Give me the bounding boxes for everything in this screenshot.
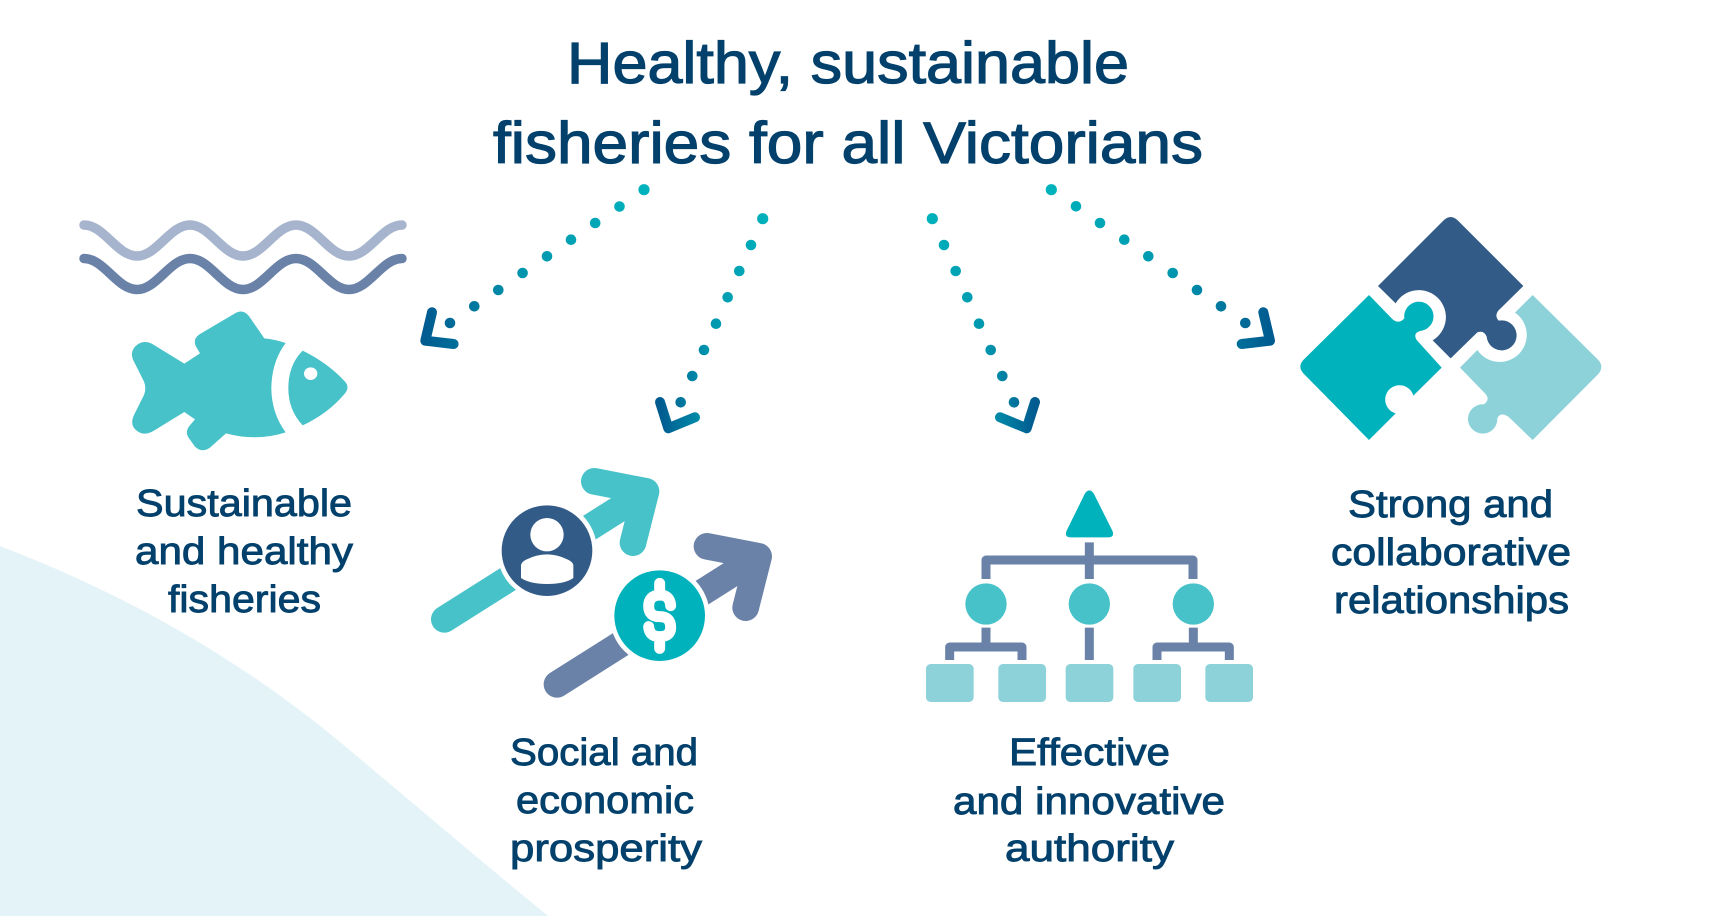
dollar badge xyxy=(610,566,710,666)
person badge xyxy=(497,501,597,601)
label: strong and collaborative relationships xyxy=(1331,484,1571,622)
top triangle xyxy=(1066,490,1113,537)
arrow: to social and economic prosperity xyxy=(660,213,768,428)
label: sustainable and healthy fisheries: and healthy xyxy=(135,531,353,573)
slate rising arrow xyxy=(557,546,759,684)
title: fisheries for all Victorians xyxy=(493,111,1203,176)
connector lines xyxy=(950,542,1229,660)
middle circles xyxy=(965,583,1214,625)
label: social and economic prosperity: prosperity xyxy=(510,828,702,870)
teal rising arrow xyxy=(444,481,646,619)
arrow: to sustainable fisheries xyxy=(425,184,650,344)
label: social and economic prosperity: economic xyxy=(516,780,694,822)
bottom boxes xyxy=(926,664,1253,702)
title: Healthy, sustainable xyxy=(567,31,1129,96)
arrow: to effective authority xyxy=(927,213,1035,428)
label: sustainable and healthy fisheries: fisheries xyxy=(168,579,321,621)
dark puzzle piece xyxy=(1378,217,1523,358)
label: effective and innovative authority: authority xyxy=(1005,828,1174,870)
label: social and economic prosperity: Social and xyxy=(510,732,698,774)
label: sustainable and healthy fisheries xyxy=(135,483,353,621)
label: effective and innovative authority xyxy=(953,732,1225,870)
label: strong and collaborative relationships: collaborative xyxy=(1331,532,1571,574)
label: effective and innovative authority: Effective xyxy=(1009,732,1170,774)
teal puzzle piece xyxy=(1300,295,1442,440)
icon: organisation chart xyxy=(926,490,1253,702)
label: effective and innovative authority: and innovative xyxy=(953,781,1225,823)
label: strong and collaborative relationships: relationships xyxy=(1334,580,1569,622)
icon: jigsaw puzzle xyxy=(1300,217,1601,440)
title xyxy=(493,31,1203,176)
arrow: to strong relationships xyxy=(1046,184,1270,344)
light puzzle piece xyxy=(1460,295,1601,440)
label: strong and collaborative relationships: Strong and xyxy=(1348,484,1553,526)
icon: waves xyxy=(84,225,402,290)
icon: fish xyxy=(132,311,347,450)
label: sustainable and healthy fisheries: Sustainable xyxy=(136,483,352,525)
icon: rising arrows with person and dollar xyxy=(444,481,759,684)
background hill xyxy=(0,546,548,916)
label: social and economic prosperity xyxy=(510,732,702,870)
